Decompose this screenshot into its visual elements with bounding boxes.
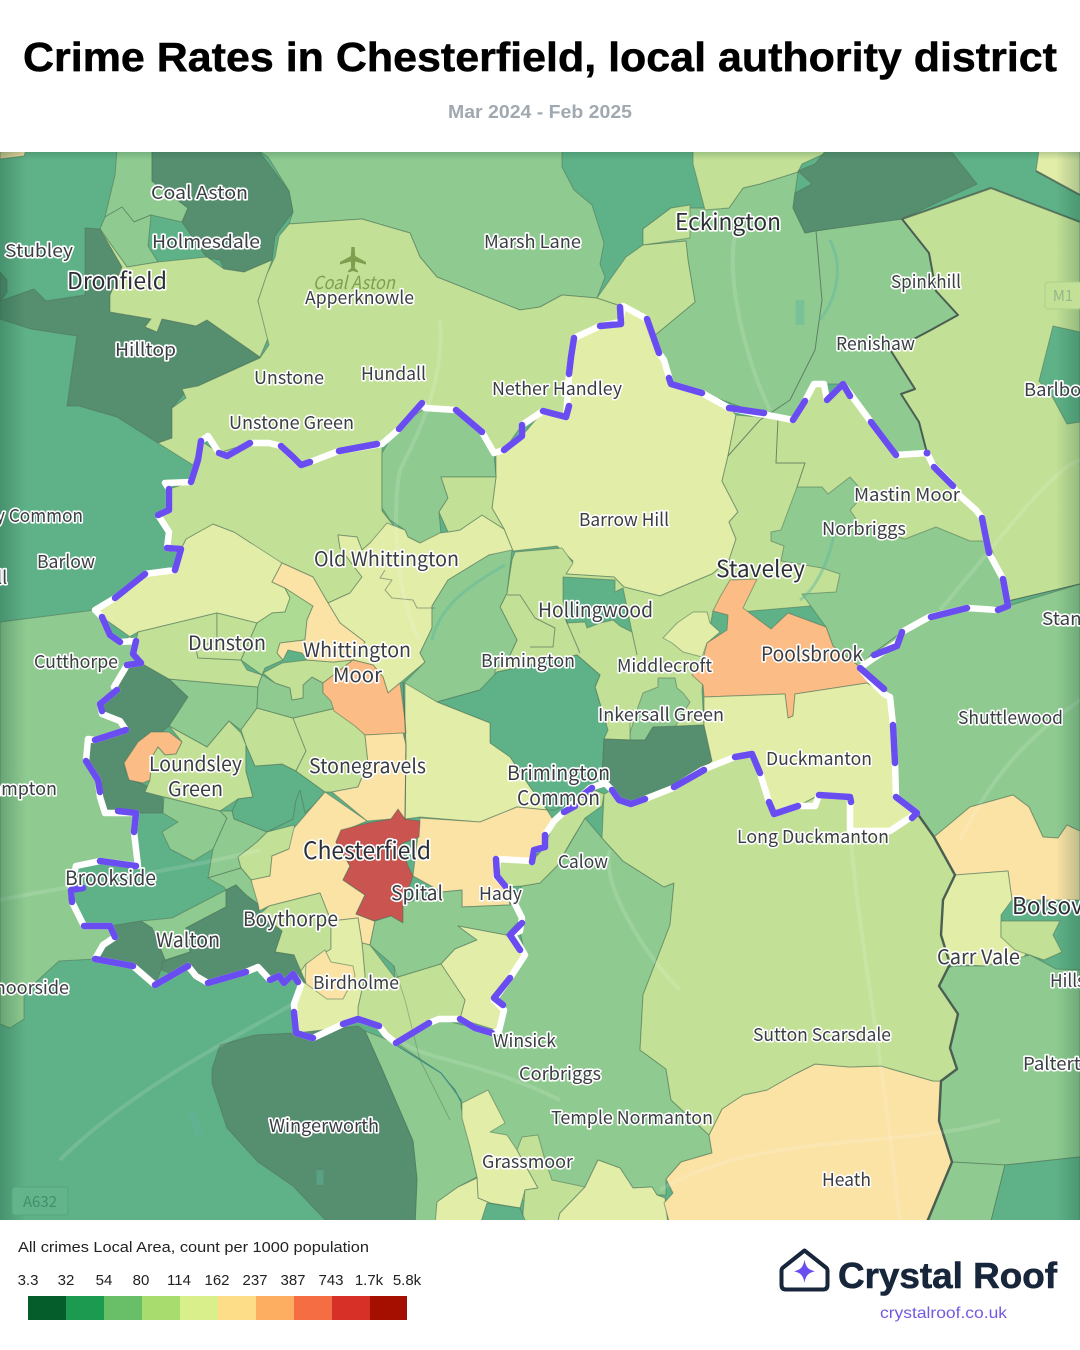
label: Hundall: Hundall <box>361 360 426 386</box>
label: Barrow Hill: Barrow Hill <box>579 506 669 532</box>
label: Birdholme: Birdholme <box>313 969 399 995</box>
icon: airport plane <box>340 247 366 272</box>
label: Heath: Heath <box>822 1166 871 1192</box>
road shield: M1: M1 <box>1053 285 1073 306</box>
label: Brookside: Brookside <box>65 862 156 891</box>
label: Sutton Scarsdale: Sutton Scarsdale <box>753 1021 891 1047</box>
place name labels <box>0 179 1080 1192</box>
label: Unstone: Unstone <box>254 364 324 390</box>
label: Calow: Calow <box>558 848 608 874</box>
legend scale numbers: 3.3 <box>18 1272 38 1289</box>
label: Spital: Spital <box>391 877 443 906</box>
label: Brimington Common <box>507 757 610 811</box>
label: Long Duckmanton: Long Duckmanton <box>737 823 889 849</box>
label: Barlow: Barlow <box>37 548 95 574</box>
label: Dronfield: Dronfield <box>67 262 167 296</box>
map regions by crime rate <box>0 150 1080 1225</box>
label: Middlecroft: Middlecroft <box>617 652 712 678</box>
legend scale numbers: 743 <box>318 1272 344 1289</box>
label: Duckmanton: Duckmanton <box>766 745 872 771</box>
Inkersall dark low-rate area <box>602 725 712 804</box>
label: Dunston: Dunston <box>188 627 266 656</box>
Whittington yellow strip <box>272 563 365 662</box>
district border lines <box>380 171 1080 1222</box>
legend scale numbers: 237 <box>242 1272 268 1289</box>
district boundary: purple dashes <box>71 307 1008 1043</box>
label: Nether Handley: Nether Handley <box>492 375 623 401</box>
label: Whittington Moor: Moor <box>333 659 382 688</box>
label: Marsh Lane: Marsh Lane <box>484 228 581 254</box>
legend scale numbers: 1.7k <box>355 1272 384 1289</box>
label: Apperknowle: Apperknowle <box>305 284 414 310</box>
label: Unstone Green: Unstone Green <box>229 409 354 435</box>
roads <box>0 220 1080 1225</box>
road shield: A632: A632 <box>23 1191 57 1212</box>
district boundary: white base line <box>71 306 1008 1043</box>
label: Temple Normanton: Temple Normanton <box>551 1104 713 1130</box>
label: Walton: Walton <box>156 924 220 953</box>
legend scale numbers: 5.8k <box>393 1272 422 1289</box>
label: Carr Vale: Carr Vale <box>937 941 1020 970</box>
website link text: crystalroof.co.uk <box>880 1305 1008 1322</box>
label: Grassmoor: Grassmoor <box>482 1148 574 1174</box>
legend scale numbers: 114 <box>167 1272 191 1289</box>
label: Brimington Common: Brimington <box>507 757 610 786</box>
Sutton Scarsdale: large light green district <box>602 754 958 1135</box>
Grassmoor pale area <box>462 1090 538 1208</box>
legend scale numbers: 32 <box>58 1272 74 1289</box>
label: Coal Aston airport: Coal Aston <box>313 269 396 295</box>
label: Hilltop: Hilltop <box>115 336 176 362</box>
legend scale numbers: 54 <box>96 1272 112 1289</box>
label: Renishaw: Renishaw <box>836 330 915 356</box>
label: Hady: Hady <box>479 880 523 906</box>
label: Whittington Moor <box>303 634 411 688</box>
label: Mastin Moor: Mastin Moor <box>854 481 961 507</box>
legend scale numbers: 162 <box>204 1272 230 1289</box>
Whittington Moor orange area <box>323 660 406 735</box>
legend scale numbers: 80 <box>133 1272 149 1289</box>
label: Hollingwood: Hollingwood <box>538 594 653 623</box>
label: Loundsley Green: Loundsley <box>149 748 243 777</box>
rivers and reservoirs <box>190 240 837 1185</box>
label: Old Whittington: Old Whittington <box>314 543 459 572</box>
title: Crime Rates in Chesterfield, local authority district <box>23 34 1057 80</box>
label: Shuttlewood: Shuttlewood <box>958 704 1063 730</box>
legend scale numbers: 387 <box>280 1272 306 1289</box>
label: Holmesdale: Holmesdale <box>152 228 260 254</box>
label: Cutthorpe: Cutthorpe <box>34 648 118 674</box>
label: Stonegravels: Stonegravels <box>309 750 426 779</box>
label: Brimington: Brimington <box>481 647 575 673</box>
label: Inkersall Green: Inkersall Green <box>598 701 724 727</box>
logo wordmark: Crystal Roof <box>838 1255 1058 1296</box>
label: Chesterfield: Chesterfield <box>303 831 431 866</box>
panel: legend <box>18 1239 422 1320</box>
label: Norbriggs: Norbriggs <box>822 515 906 541</box>
road shield: M1 <box>1045 282 1080 309</box>
label: Winsick: Winsick <box>493 1027 556 1053</box>
Heath: high-rate yellow district <box>664 1064 952 1225</box>
label: Loundsley Green: Green <box>168 773 223 802</box>
Wingerworth dark low-rate area <box>212 1026 417 1225</box>
label: Loundsley Green <box>149 748 243 802</box>
label: Boythorpe: Boythorpe <box>243 903 338 932</box>
legend heading: All crimes Local Area, count per 1000 population <box>18 1239 369 1256</box>
legend scale numbers <box>18 1272 422 1289</box>
label: Spinkhill: Spinkhill <box>891 268 961 294</box>
label: Poolsbrook: Poolsbrook <box>761 638 863 667</box>
label: Whittington Moor: Whittington <box>303 634 411 663</box>
legend colour swatches <box>28 1296 407 1320</box>
road shield: A632 <box>12 1187 68 1215</box>
subtitle: date range: Mar 2024 - Feb 2025 <box>448 102 632 122</box>
icon: house with star <box>782 1250 828 1290</box>
label: Coal Aston: Coal Aston <box>151 179 248 205</box>
Chesterfield town centre: highest crime area <box>336 809 420 923</box>
label: Stubley: Stubley <box>5 237 74 263</box>
panel: edge vignette <box>0 152 1080 1220</box>
label: Brimington Common: Common <box>517 782 600 811</box>
panel: Crystal Roof logo <box>782 1250 1058 1322</box>
panel: choropleth map <box>0 150 1080 1225</box>
label: Corbriggs: Corbriggs <box>519 1060 601 1086</box>
Walton dark low-rate areas <box>100 920 166 981</box>
label: Staveley: Staveley <box>716 550 805 584</box>
label: Wingerworth: Wingerworth <box>269 1112 379 1138</box>
label: Eckington: Eckington <box>675 203 781 237</box>
